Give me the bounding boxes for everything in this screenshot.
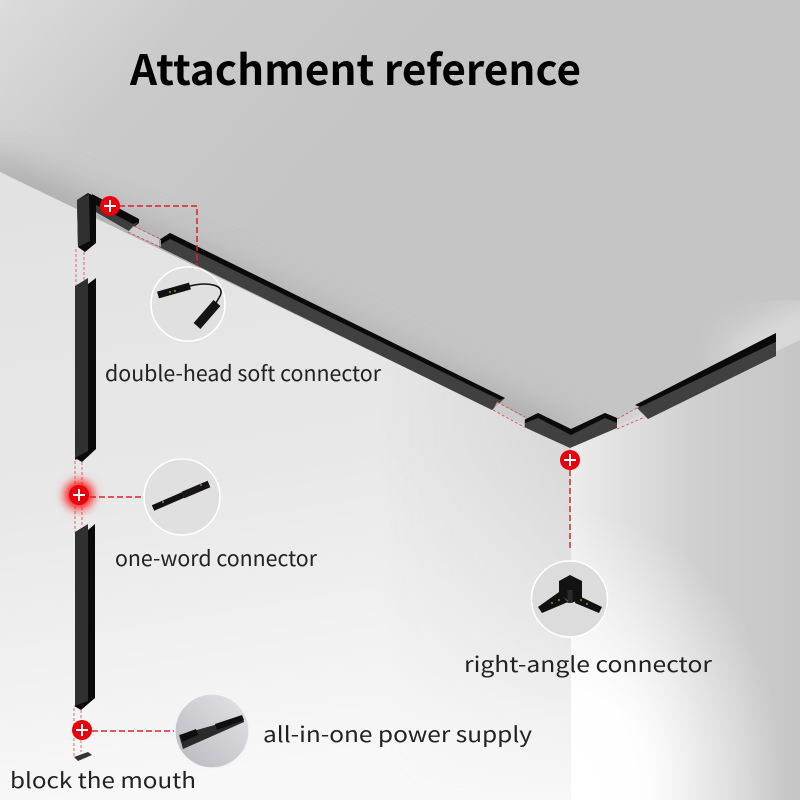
right wall background: [571, 340, 800, 800]
soft connector image circle: [151, 267, 225, 341]
one-word connector image circle: [144, 459, 220, 535]
vertical track section 2: [75, 278, 96, 462]
red dashed leader to soft connector: [110, 206, 197, 266]
marker: plus: [560, 450, 580, 470]
label: all-in-one power supply: all-in-one power supply: [263, 718, 532, 749]
label: right-angle connector: right-angle connector: [464, 648, 713, 679]
marker: plus: [72, 720, 92, 740]
end cap piece: [74, 752, 92, 761]
one-word connector callout: [65, 459, 220, 535]
light gaps between track segments: [128, 226, 645, 429]
double-head soft connector callout: [100, 196, 225, 341]
label: one-word connector: one-word connector: [115, 542, 318, 573]
horizontal stub from corner: [92, 194, 139, 231]
dashed guides, thin: [74, 226, 645, 757]
title: Attachment reference: [129, 37, 581, 98]
left wall background: [0, 172, 571, 796]
vertical track section 3: [74, 524, 95, 710]
long diagonal track: [159, 233, 505, 410]
red glow: [65, 481, 93, 509]
corner track: [524, 413, 617, 448]
red dashed leader: [569, 470, 571, 550]
right-angle connector callout: [532, 450, 608, 637]
ceiling background: [0, 0, 800, 447]
all-in-one power supply callout: [72, 694, 249, 768]
red dashed leader: [90, 496, 146, 498]
label: block the mouth: block the mouth: [10, 764, 196, 795]
marker: plus: [100, 196, 120, 216]
power supply image circle: [175, 694, 249, 768]
red dashed leader: [92, 730, 174, 732]
label: double-head soft connector: double-head soft connector: [105, 357, 382, 388]
right-angle connector image circle: [532, 561, 608, 637]
right track: [635, 333, 776, 419]
marker: plus: [69, 485, 89, 505]
vertical track section 1: [77, 193, 96, 252]
